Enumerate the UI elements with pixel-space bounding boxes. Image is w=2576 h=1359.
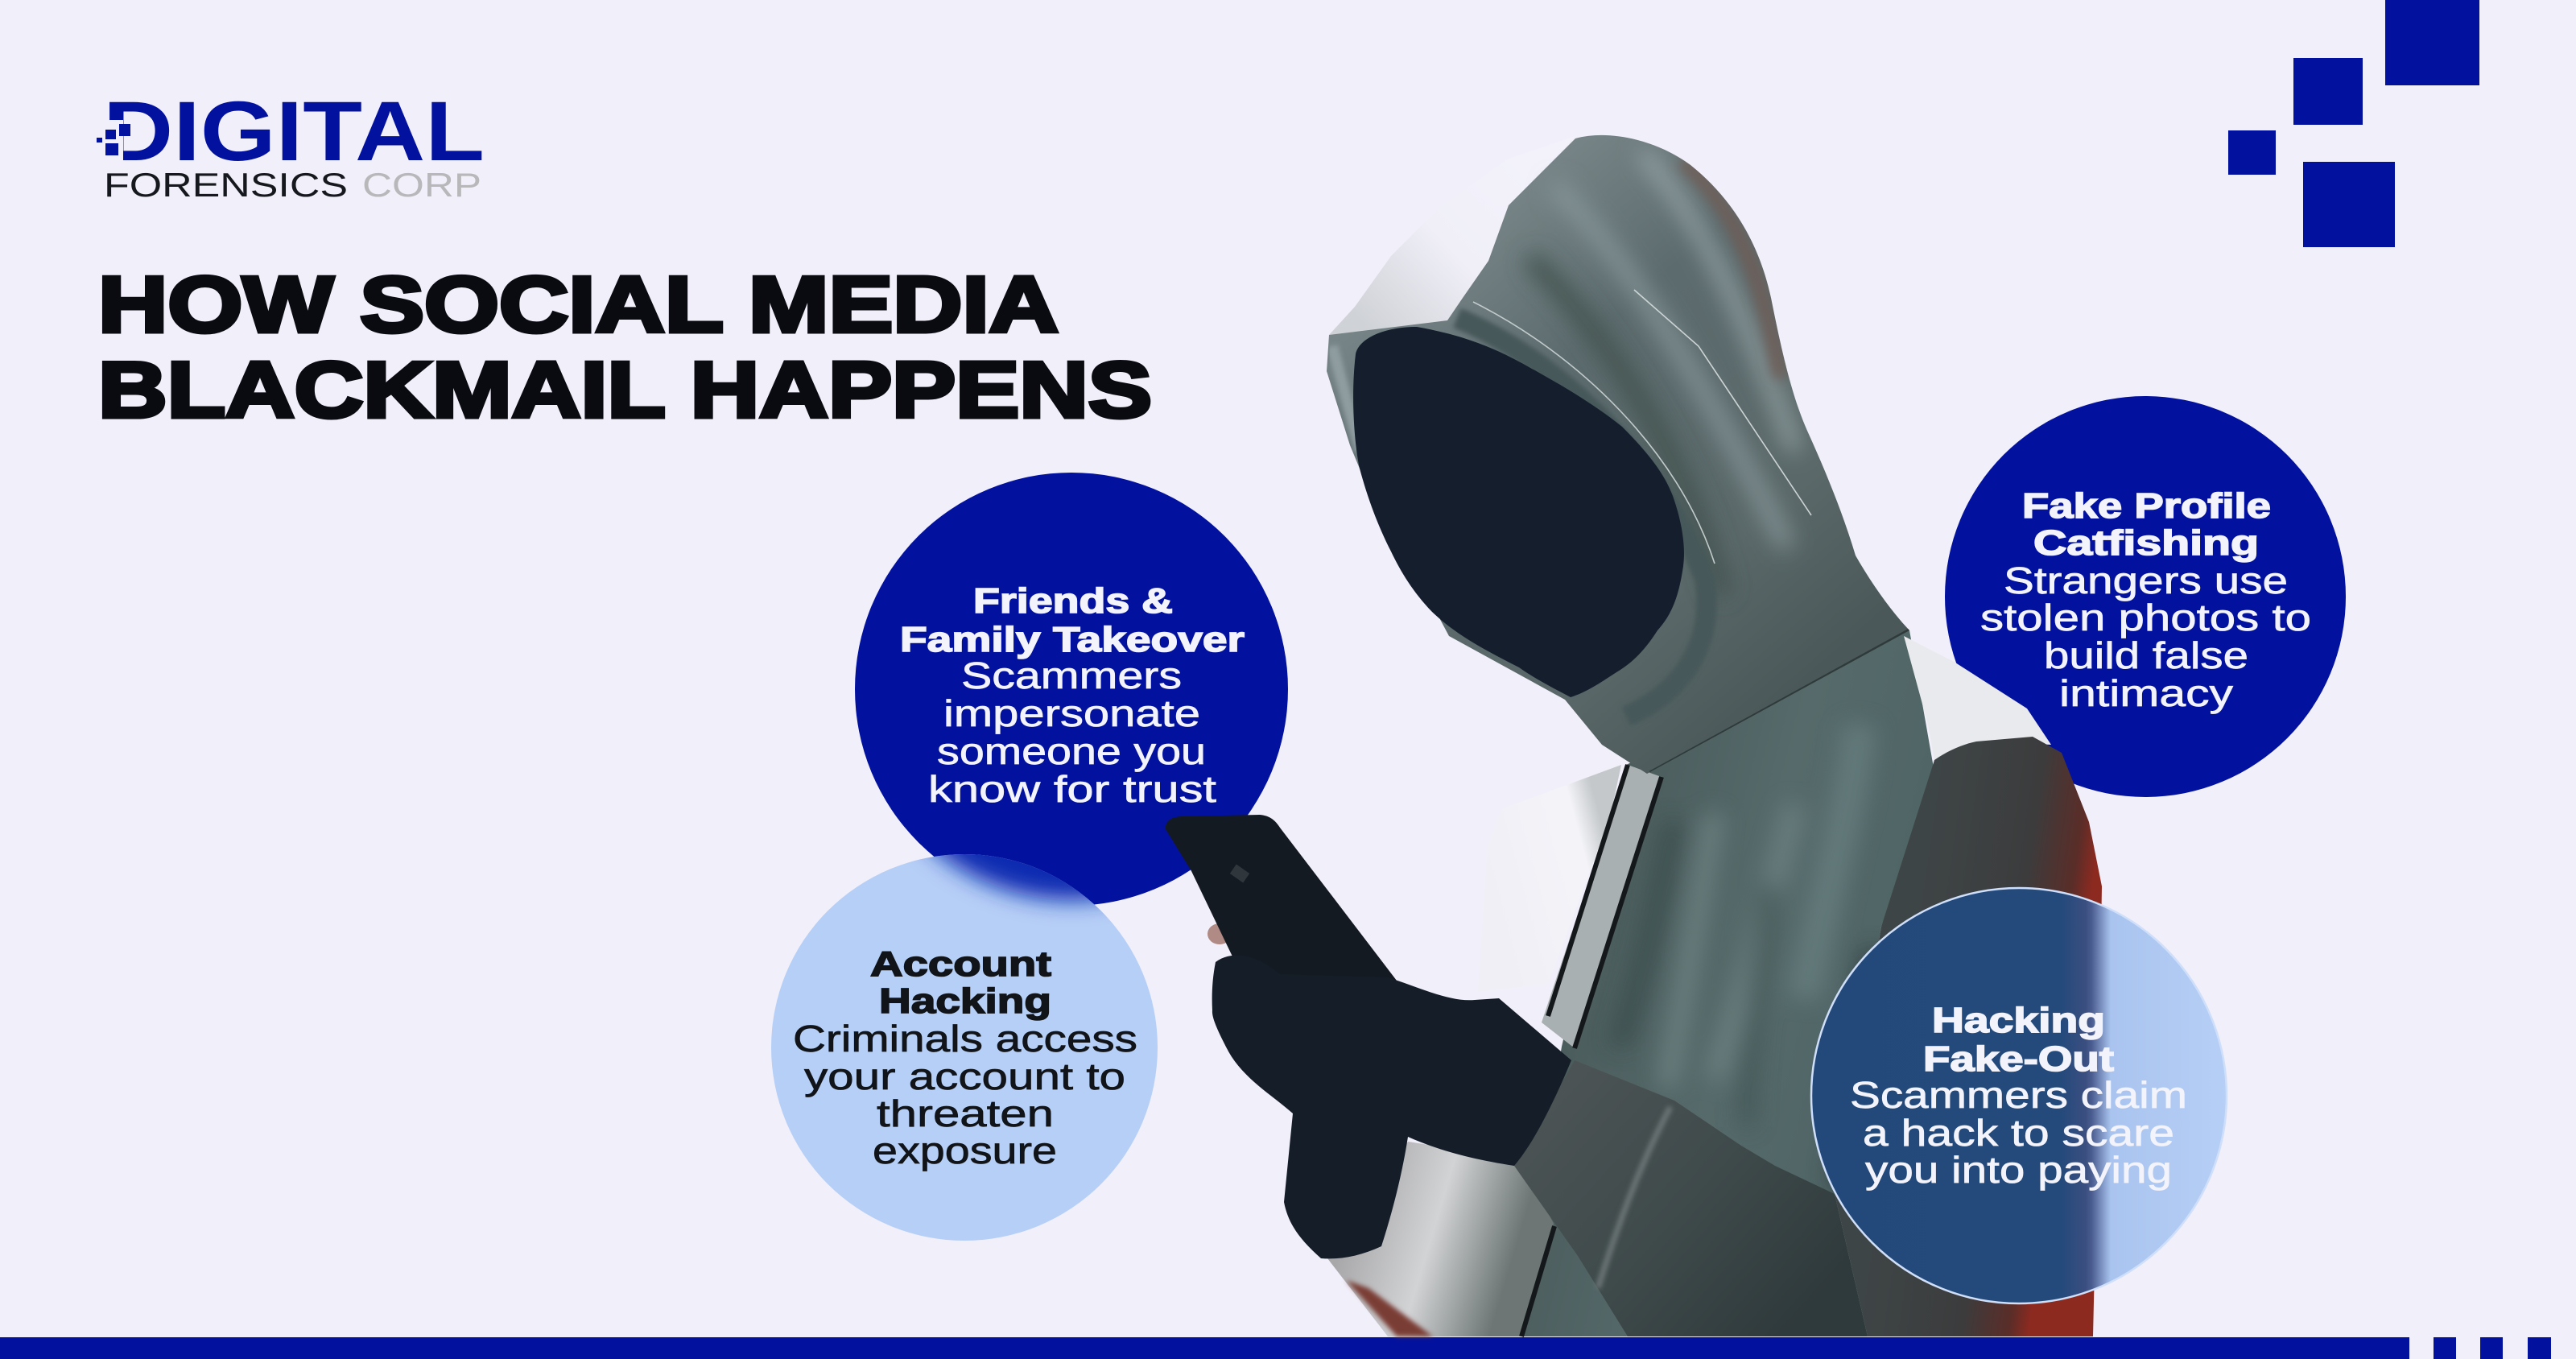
circle: [855, 473, 1288, 906]
logo subline corp: CORP: [362, 166, 481, 204]
blurred overlap: [919, 854, 1105, 919]
bottom bar with squares: [0, 1337, 2551, 1359]
title: [98, 260, 1152, 434]
heading line 2: Catfishing: [2033, 523, 2259, 563]
body text: [1980, 560, 2311, 714]
lower white hoodie panel: [1327, 1142, 1554, 1336]
body text: Scammers claim: [1850, 1074, 2187, 1116]
body text: impersonate: [943, 692, 1200, 734]
body text: stolen photos to: [1980, 597, 2311, 638]
title line 2: BLACKMAIL HAPPENS: [98, 345, 1152, 434]
heading: Hacking: [1932, 1001, 2105, 1040]
circle: [1945, 396, 2346, 797]
panel: fake profile catfishing: [1945, 396, 2346, 797]
right sleeve: [1835, 737, 2102, 1336]
hooded figure: [1166, 135, 2102, 1336]
white chest panel: [1478, 765, 1621, 992]
logo subline forensics: FORENSICS: [104, 166, 348, 204]
heading: Fake Profile: [2022, 486, 2271, 526]
body text: know for trust: [928, 768, 1216, 810]
body text: someone you: [937, 730, 1206, 772]
phone: [1166, 815, 1397, 1039]
thumb tip: [1208, 923, 1232, 944]
heading line 2: Fake-Out: [1923, 1039, 2114, 1079]
body text: [1850, 1074, 2187, 1191]
cuff fold: [1598, 1107, 1670, 1288]
heading: Friends &: [973, 581, 1173, 621]
body text: build false: [2044, 634, 2248, 676]
decorative squares top right: [2228, 0, 2479, 247]
circle: [771, 854, 1158, 1241]
hood folds: [1332, 153, 1909, 773]
hood highlight: [1329, 136, 1575, 342]
panel: account hacking: [771, 854, 1158, 1241]
shoulder highlight: [1904, 636, 2051, 760]
body text: your account to: [804, 1055, 1125, 1097]
heading line 2: Family Takeover: [900, 620, 1245, 659]
glove: [1212, 956, 1571, 1258]
logo pixel notch: [97, 120, 130, 162]
body text: Criminals access: [793, 1018, 1137, 1060]
hood: [1327, 135, 1909, 774]
circle: [1811, 888, 2227, 1303]
body text: intimacy: [2059, 672, 2233, 714]
panel: hacking fake-out: [1811, 888, 2227, 1303]
heading line 2: Hacking: [879, 981, 1051, 1021]
red hem accent: [1346, 1280, 1433, 1336]
body text: you into paying: [1865, 1149, 2172, 1191]
body text: Strangers use: [2004, 560, 2288, 601]
body text: Scammers: [961, 655, 1182, 696]
body text: [928, 655, 1216, 810]
phone camera: [1230, 865, 1249, 882]
body text: a hack to scare: [1863, 1112, 2174, 1154]
torso: [1513, 630, 1935, 1336]
left arm sleeve: [1514, 1060, 1868, 1336]
logo: Digital Forensics Corp: [97, 85, 485, 204]
torso folds: [1618, 725, 1876, 1192]
body text: threaten: [877, 1093, 1054, 1134]
logo wordmark: DIGITAL: [103, 85, 485, 179]
zipper strip: [1542, 765, 1662, 1048]
heading: Account: [870, 944, 1051, 984]
panel: friends and family takeover: [855, 473, 1288, 906]
body text: [793, 1018, 1137, 1171]
zipper lines: [1521, 765, 1662, 1336]
title line 1: HOW SOCIAL MEDIA: [98, 260, 1059, 349]
body text: exposure: [873, 1130, 1057, 1171]
face void: [1353, 327, 1684, 697]
